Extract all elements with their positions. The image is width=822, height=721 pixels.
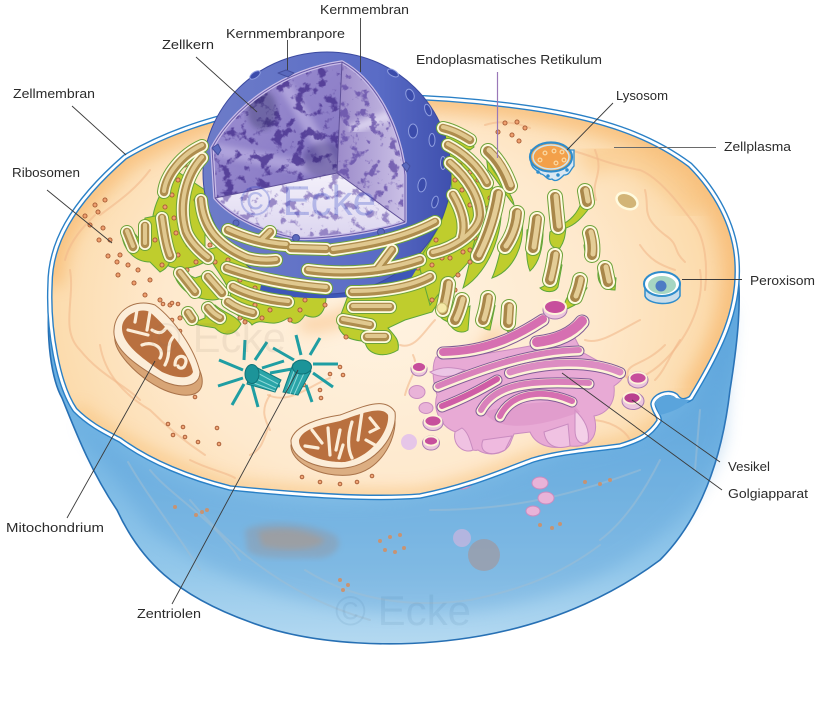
- ribosomes in body: [175, 480, 610, 590]
- labels: Ribosomen: [12, 166, 80, 180]
- watermark: © Ecke: [335, 587, 471, 634]
- endoplasmic reticulum: green backing: [122, 130, 616, 355]
- golgi rear mass: [433, 338, 624, 454]
- nucleus: [203, 52, 451, 298]
- cut-away left panel: [214, 64, 342, 197]
- cell plasma: top surface: [50, 97, 737, 497]
- labels: Zentriolen: [137, 607, 201, 621]
- cell body: blue lower volume: [48, 262, 739, 644]
- labels: Lysosom: [616, 89, 668, 103]
- labels: Endoplasmatisches Retikulum: [416, 53, 602, 67]
- filaments inside the body: [128, 410, 700, 620]
- watermark: © Ecke: [150, 314, 286, 361]
- notch fill: [655, 395, 690, 415]
- nuclear pores on sphere: [248, 67, 446, 209]
- labels: Peroxisom: [750, 274, 815, 288]
- membrane: [50, 97, 737, 497]
- lysosome: [530, 142, 574, 180]
- cytoskeleton fibres: [65, 122, 706, 478]
- labels: Kernmembran: [320, 3, 409, 17]
- watermark on nucleus: © Ecke: [240, 177, 376, 224]
- orange rim: [50, 97, 737, 497]
- labels: Zellmembran: [13, 87, 95, 101]
- cut-away bottom panel: [218, 174, 403, 237]
- vesicles: [401, 300, 648, 450]
- peroxisome: [644, 272, 680, 304]
- mitochondrion lower: [291, 404, 395, 475]
- ghost vesicles in body: [449, 473, 554, 571]
- ribosomes: [85, 122, 525, 484]
- golgi apparatus: [430, 319, 624, 454]
- labels: Zellkern: [162, 38, 214, 52]
- endoplasmic reticulum: cisternae: [127, 127, 640, 337]
- labels: Mitochondrium: [6, 521, 104, 535]
- mitochondrion upper left: [114, 303, 202, 395]
- labels: Golgiapparat: [728, 487, 809, 501]
- depth shading under the top surface: [75, 300, 735, 613]
- nuclear membrane cut edges: [212, 62, 410, 242]
- leader lines: [47, 18, 742, 604]
- labels: Zellplasma: [724, 140, 791, 154]
- ghost mitochondrion in body: [245, 523, 339, 558]
- centrioles: [218, 335, 338, 407]
- free ER vesicle: [614, 190, 640, 212]
- labels: Vesikel: [728, 460, 770, 474]
- labels: Kernmembranpore: [226, 27, 345, 41]
- watermark: [150, 314, 471, 634]
- cut-away right panel: [338, 64, 404, 220]
